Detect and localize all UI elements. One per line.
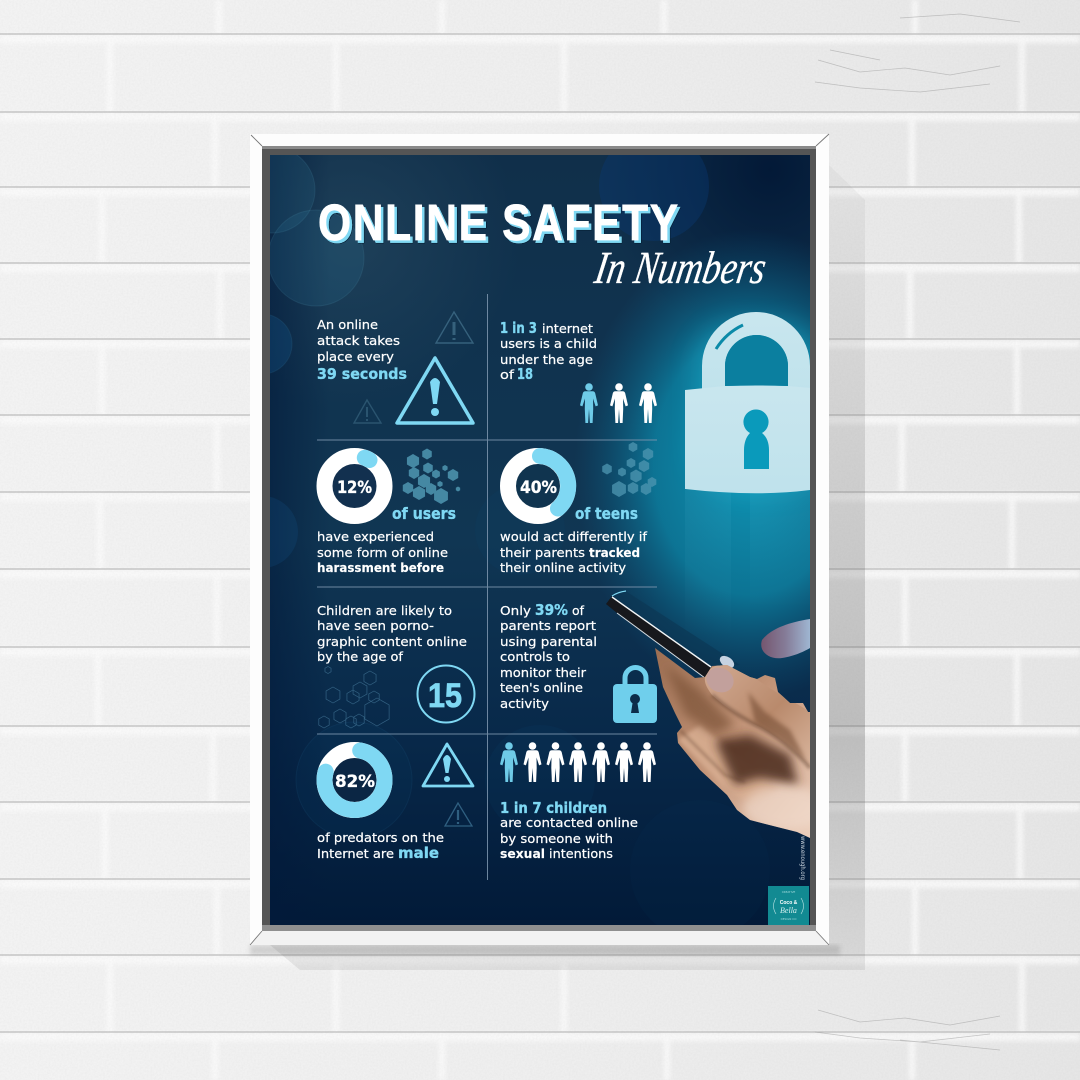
attack text: attack takes [317, 333, 400, 348]
children text: 1 in 7 children [500, 799, 607, 817]
parents text: monitor their [500, 665, 587, 680]
parents text [500, 601, 597, 711]
age text: Children are likely to [317, 603, 452, 618]
40% text: their online activity [500, 560, 627, 575]
big padlock with glow [685, 312, 820, 493]
40% text: their parents [500, 545, 585, 560]
decorative hexagon cluster [403, 448, 460, 504]
predators text: male [398, 844, 439, 862]
poster background gradient [270, 155, 810, 925]
parents text: parents report [500, 618, 596, 633]
donut chart 12% [324, 456, 384, 516]
parents text: controls to [500, 649, 570, 664]
icon: seven people [500, 742, 656, 782]
keyhole [743, 409, 769, 469]
stat: 40% of teens [500, 442, 656, 575]
source credit (vertical): www.enough.org [799, 836, 807, 880]
12% text [317, 504, 456, 575]
attack text: 39 seconds [317, 365, 407, 383]
donut chart 40%: 40% [520, 478, 557, 498]
icon: faint warning triangle [445, 803, 472, 826]
children text: by someone with [500, 831, 613, 846]
children text [500, 799, 638, 861]
age text [317, 603, 467, 664]
12% text: have experienced [317, 529, 434, 544]
logo: Coco & Bella: Bella [780, 906, 797, 915]
children text: intentions [549, 846, 613, 861]
attack text [317, 317, 407, 383]
logo: Coco & Bella: Coco & [780, 900, 798, 906]
12% text: some form of online [317, 545, 448, 560]
parents text: activity [500, 696, 550, 711]
decorative bokeh circles [270, 155, 709, 838]
icon: three people [580, 383, 657, 423]
donut chart 12%: 12% [337, 478, 372, 498]
decorative hexagon outlines [319, 666, 389, 728]
40% text: would act differently if [500, 529, 648, 544]
predators text: Internet are [317, 846, 394, 861]
circled number 15 [418, 666, 474, 722]
1 in 3 text [500, 321, 596, 380]
donut chart 40% [508, 456, 568, 516]
stat: 39% of parents [500, 601, 657, 723]
predators text [318, 832, 444, 858]
1 in 3 text: of [500, 367, 515, 382]
age text: graphic content online [317, 634, 467, 649]
parents text: 39% [535, 601, 568, 619]
stat: attack every 39 seconds [317, 312, 473, 423]
stat: age of 15 [317, 603, 474, 728]
donut chart 82% [324, 750, 385, 810]
40% text: tracked [589, 545, 640, 560]
white picture frame [250, 134, 829, 945]
parents text: using parental [500, 634, 597, 649]
12% text: harassment before [317, 560, 444, 575]
poster [270, 155, 810, 925]
stat: 1 in 7 children [500, 742, 656, 861]
grid dividers [317, 294, 657, 880]
age text: have seen porno- [317, 618, 434, 633]
children text: sexual [500, 846, 545, 861]
attack text: An online [317, 317, 378, 332]
smartphone [606, 590, 740, 679]
40% text [500, 504, 648, 575]
1 in 3 text: 18 [517, 365, 533, 383]
age text: by the age of [317, 649, 404, 664]
40% text: of teens [575, 504, 638, 523]
stat: 12% of users [317, 448, 460, 575]
1 in 3 text: internet [542, 321, 593, 336]
parents text: Only [500, 603, 532, 618]
subtitle: In Numbers: In Numbers [590, 243, 770, 294]
predators text: of predators on the [317, 830, 444, 845]
parents text: teen's online [500, 680, 583, 695]
stat: 82% of predators [317, 744, 473, 862]
stat: 1 in 3 internet users [500, 319, 657, 423]
donut chart 82%: 82% [335, 772, 375, 792]
1 in 3 text: 1 in 3 [500, 319, 537, 337]
logo: Coco & Bella: DESIGN CO [781, 917, 797, 921]
logo: Coco & Bella [768, 886, 809, 925]
logo: Coco & Bella: CREATIVE [782, 890, 796, 894]
circled number 15: 15 [428, 677, 462, 715]
1 in 3 text: under the age [500, 352, 593, 367]
icon: warning triangle [423, 744, 473, 786]
parents text: of [572, 603, 585, 618]
children text: are contacted online [500, 815, 638, 830]
12% text: of users [392, 504, 456, 523]
attack text: place every [317, 349, 395, 364]
hand holding the phone [655, 648, 827, 838]
decorative hexagon cluster [602, 442, 656, 497]
title: ONLINE SAFETY [318, 193, 680, 251]
icon: faint warning triangles [354, 312, 473, 423]
icon: small padlock [613, 668, 657, 723]
frame cast shadow [250, 165, 865, 970]
icon: large warning triangle [397, 358, 473, 423]
1 in 3 text: users is a child [500, 336, 597, 351]
fingertip pointing at phone [761, 619, 810, 658]
